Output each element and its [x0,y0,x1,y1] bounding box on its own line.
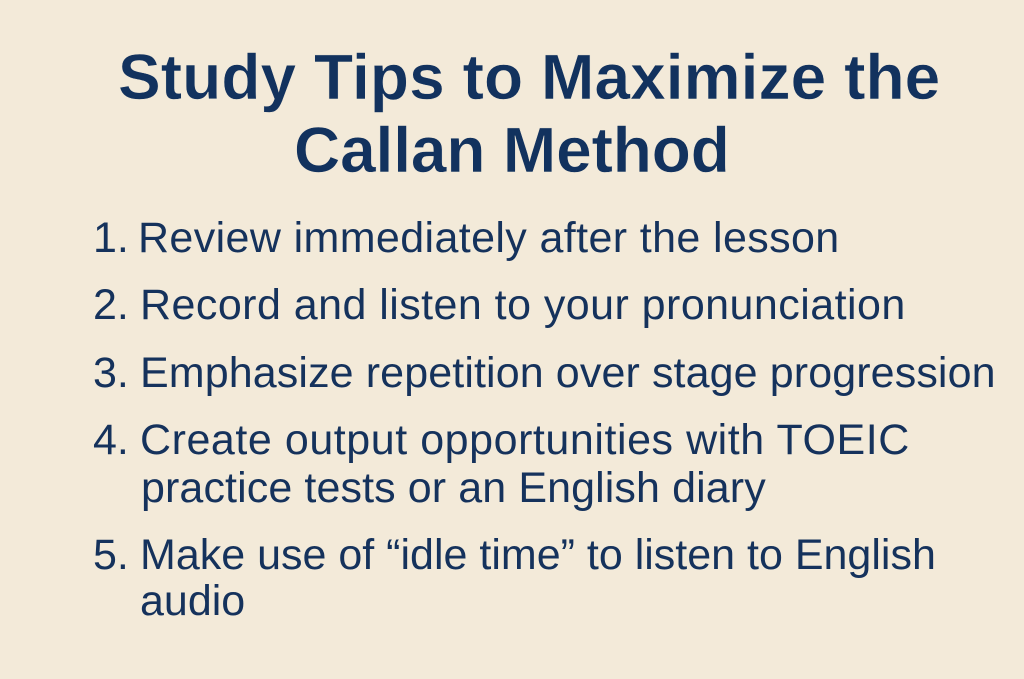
list item 3: Emphasize repetition over stage progression [140,349,996,397]
list item 5: Make use of “idle time” to listen to English [140,531,936,579]
list item 5 [93,531,936,625]
list item 5: audio [140,577,245,625]
list item 1: Review immediately after the lesson [138,214,840,262]
list item 2: 2. [93,281,129,329]
list item 1: 1. [93,214,129,262]
list item 4: Create output opportunities with TOEIC [140,416,910,464]
title: Callan Method [294,114,730,186]
title: Study Tips to Maximize the [118,41,940,113]
list item 5: 5. [93,531,129,579]
title [118,41,940,186]
list item 4 [93,416,910,512]
list item 3: 3. [93,349,129,397]
list item 4: 4. [93,416,129,464]
list item 2: Record and listen to your pronunciation [140,281,906,329]
list item 4: practice tests or an English diary [141,464,766,512]
